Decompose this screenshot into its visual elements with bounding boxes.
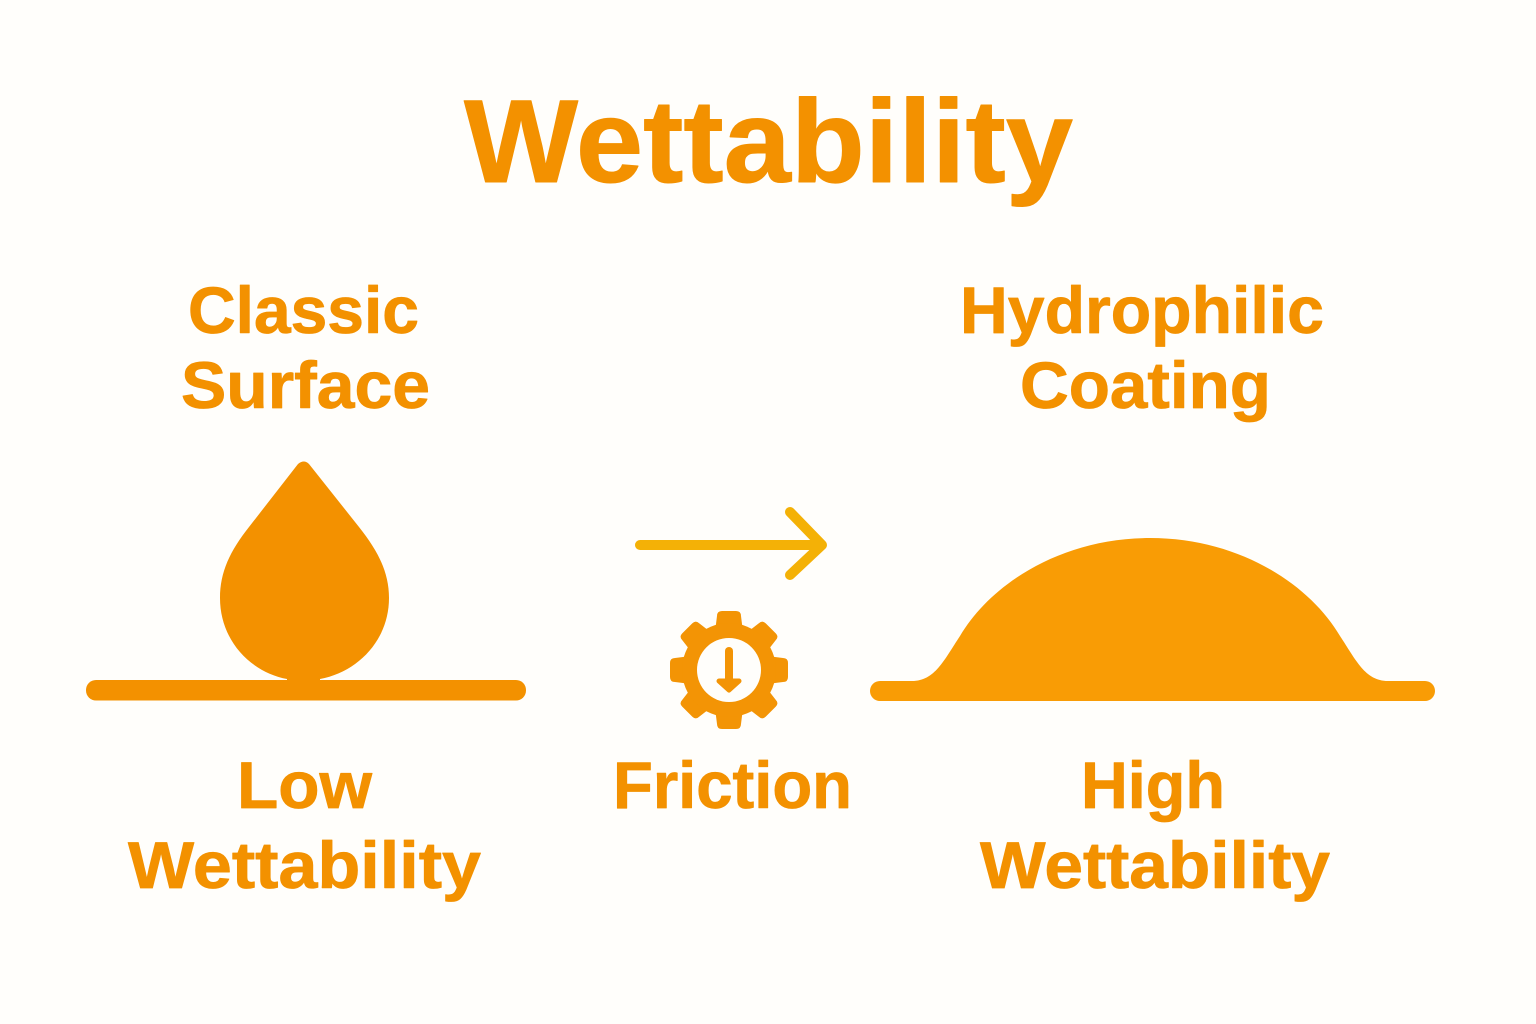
arrow: left to right — [640, 512, 822, 575]
icon: spread droplet on surface (high wettability) — [870, 538, 1435, 701]
label: low wettability: Wettability — [128, 828, 481, 902]
heading: classic surface — [181, 273, 430, 422]
label: low wettability: Low — [237, 748, 373, 822]
label: high wettability: Wettability — [980, 828, 1330, 902]
icon: tall droplet on surface (low wettability) — [86, 462, 526, 700]
title: Wettability — [464, 76, 1073, 208]
heading: hydrophilic coating: Coating — [1020, 348, 1271, 422]
label: low wettability — [128, 748, 481, 902]
heading: hydrophilic coating: Hydrophilic — [960, 273, 1324, 347]
label: friction: Friction — [613, 748, 852, 822]
heading: classic surface: Classic — [188, 273, 419, 347]
label: high wettability — [980, 748, 1330, 902]
label: high wettability: High — [1081, 748, 1225, 822]
heading: classic surface: Surface — [181, 348, 430, 422]
heading: hydrophilic coating — [960, 273, 1324, 422]
icon: gear with down arrow — [670, 611, 788, 729]
